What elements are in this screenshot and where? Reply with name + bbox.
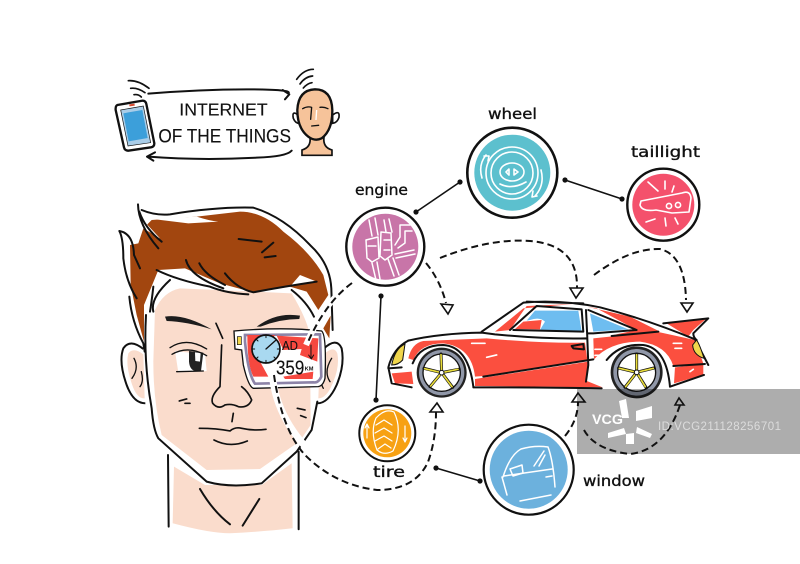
- circle: taillight icon: [627, 169, 699, 241]
- circle: wheel icon: [467, 128, 557, 218]
- label: taillight: taillight: [631, 143, 700, 161]
- neck: [168, 452, 299, 533]
- label: engine: engine: [355, 181, 408, 199]
- dashed link: engine to car roof: [440, 241, 583, 298]
- skin: [153, 288, 311, 470]
- ears: [121, 343, 343, 403]
- circle: tire icon: [359, 405, 415, 461]
- car outlines: [388, 302, 708, 388]
- heading: internet: INTERNET: [179, 100, 268, 120]
- dashed link: window to car door: [565, 393, 585, 436]
- connector: engine to wheel: [413, 179, 463, 215]
- panel: wheel: [467, 105, 557, 218]
- dashed link: eyepiece to tire/car: [272, 372, 443, 490]
- AR eyepiece display: [234, 329, 325, 388]
- dashed link: taillight area to car rear: [594, 249, 693, 312]
- connector: wheel to taillight: [562, 177, 625, 202]
- circle: engine icon: [346, 208, 424, 286]
- label: tire: tire: [373, 463, 405, 481]
- car red panels: [392, 304, 707, 387]
- dashed link: window to rear wheel: [584, 398, 684, 454]
- highlights: [472, 343, 693, 372]
- watermark logo: [608, 399, 652, 444]
- connector: engine to tire: [373, 293, 384, 403]
- connector: tire to window: [433, 465, 483, 484]
- watermark band: [577, 389, 800, 454]
- dashed link: engine to car front: [426, 263, 453, 314]
- face and hair outlines: [119, 204, 333, 485]
- car illustration: [388, 302, 708, 398]
- icon: person head: [293, 69, 339, 155]
- panel: tire: [359, 405, 415, 481]
- AR eyepiece display: KM: [305, 366, 314, 372]
- hair: [130, 212, 331, 342]
- illustration: man's face with AR eyepiece: [119, 204, 343, 533]
- panel: window: [484, 425, 645, 515]
- headlight and taillight: [392, 340, 704, 365]
- icon: smartphone: [116, 81, 154, 151]
- watermark ID: ID:VCG211128256701: [658, 421, 781, 433]
- rear wheel: [611, 346, 663, 398]
- arrow: phone to person: [148, 89, 289, 99]
- car body: [388, 303, 708, 388]
- title block: internet of the things: [116, 69, 339, 161]
- panel: engine: [346, 181, 424, 286]
- AR eyepiece display: 359: [276, 358, 304, 380]
- watermark VCG: VCG: [592, 411, 623, 427]
- AR eyepiece display: AD: [282, 339, 298, 353]
- nose and mouth: [179, 323, 306, 444]
- eyebrows: [165, 315, 300, 329]
- heading: of the things: OF THE THINGS: [158, 127, 291, 148]
- dashed link: eyepiece to engine: [306, 281, 354, 345]
- front wheel: [417, 348, 467, 398]
- hair highlights: [138, 215, 317, 287]
- label: window: window: [583, 472, 645, 490]
- circle: window icon: [484, 425, 574, 515]
- car windows: [527, 311, 628, 332]
- arrow: person to phone: [147, 151, 292, 161]
- label: wheel: wheel: [488, 105, 537, 123]
- panel: taillight: [627, 143, 700, 241]
- left eye: [170, 342, 207, 372]
